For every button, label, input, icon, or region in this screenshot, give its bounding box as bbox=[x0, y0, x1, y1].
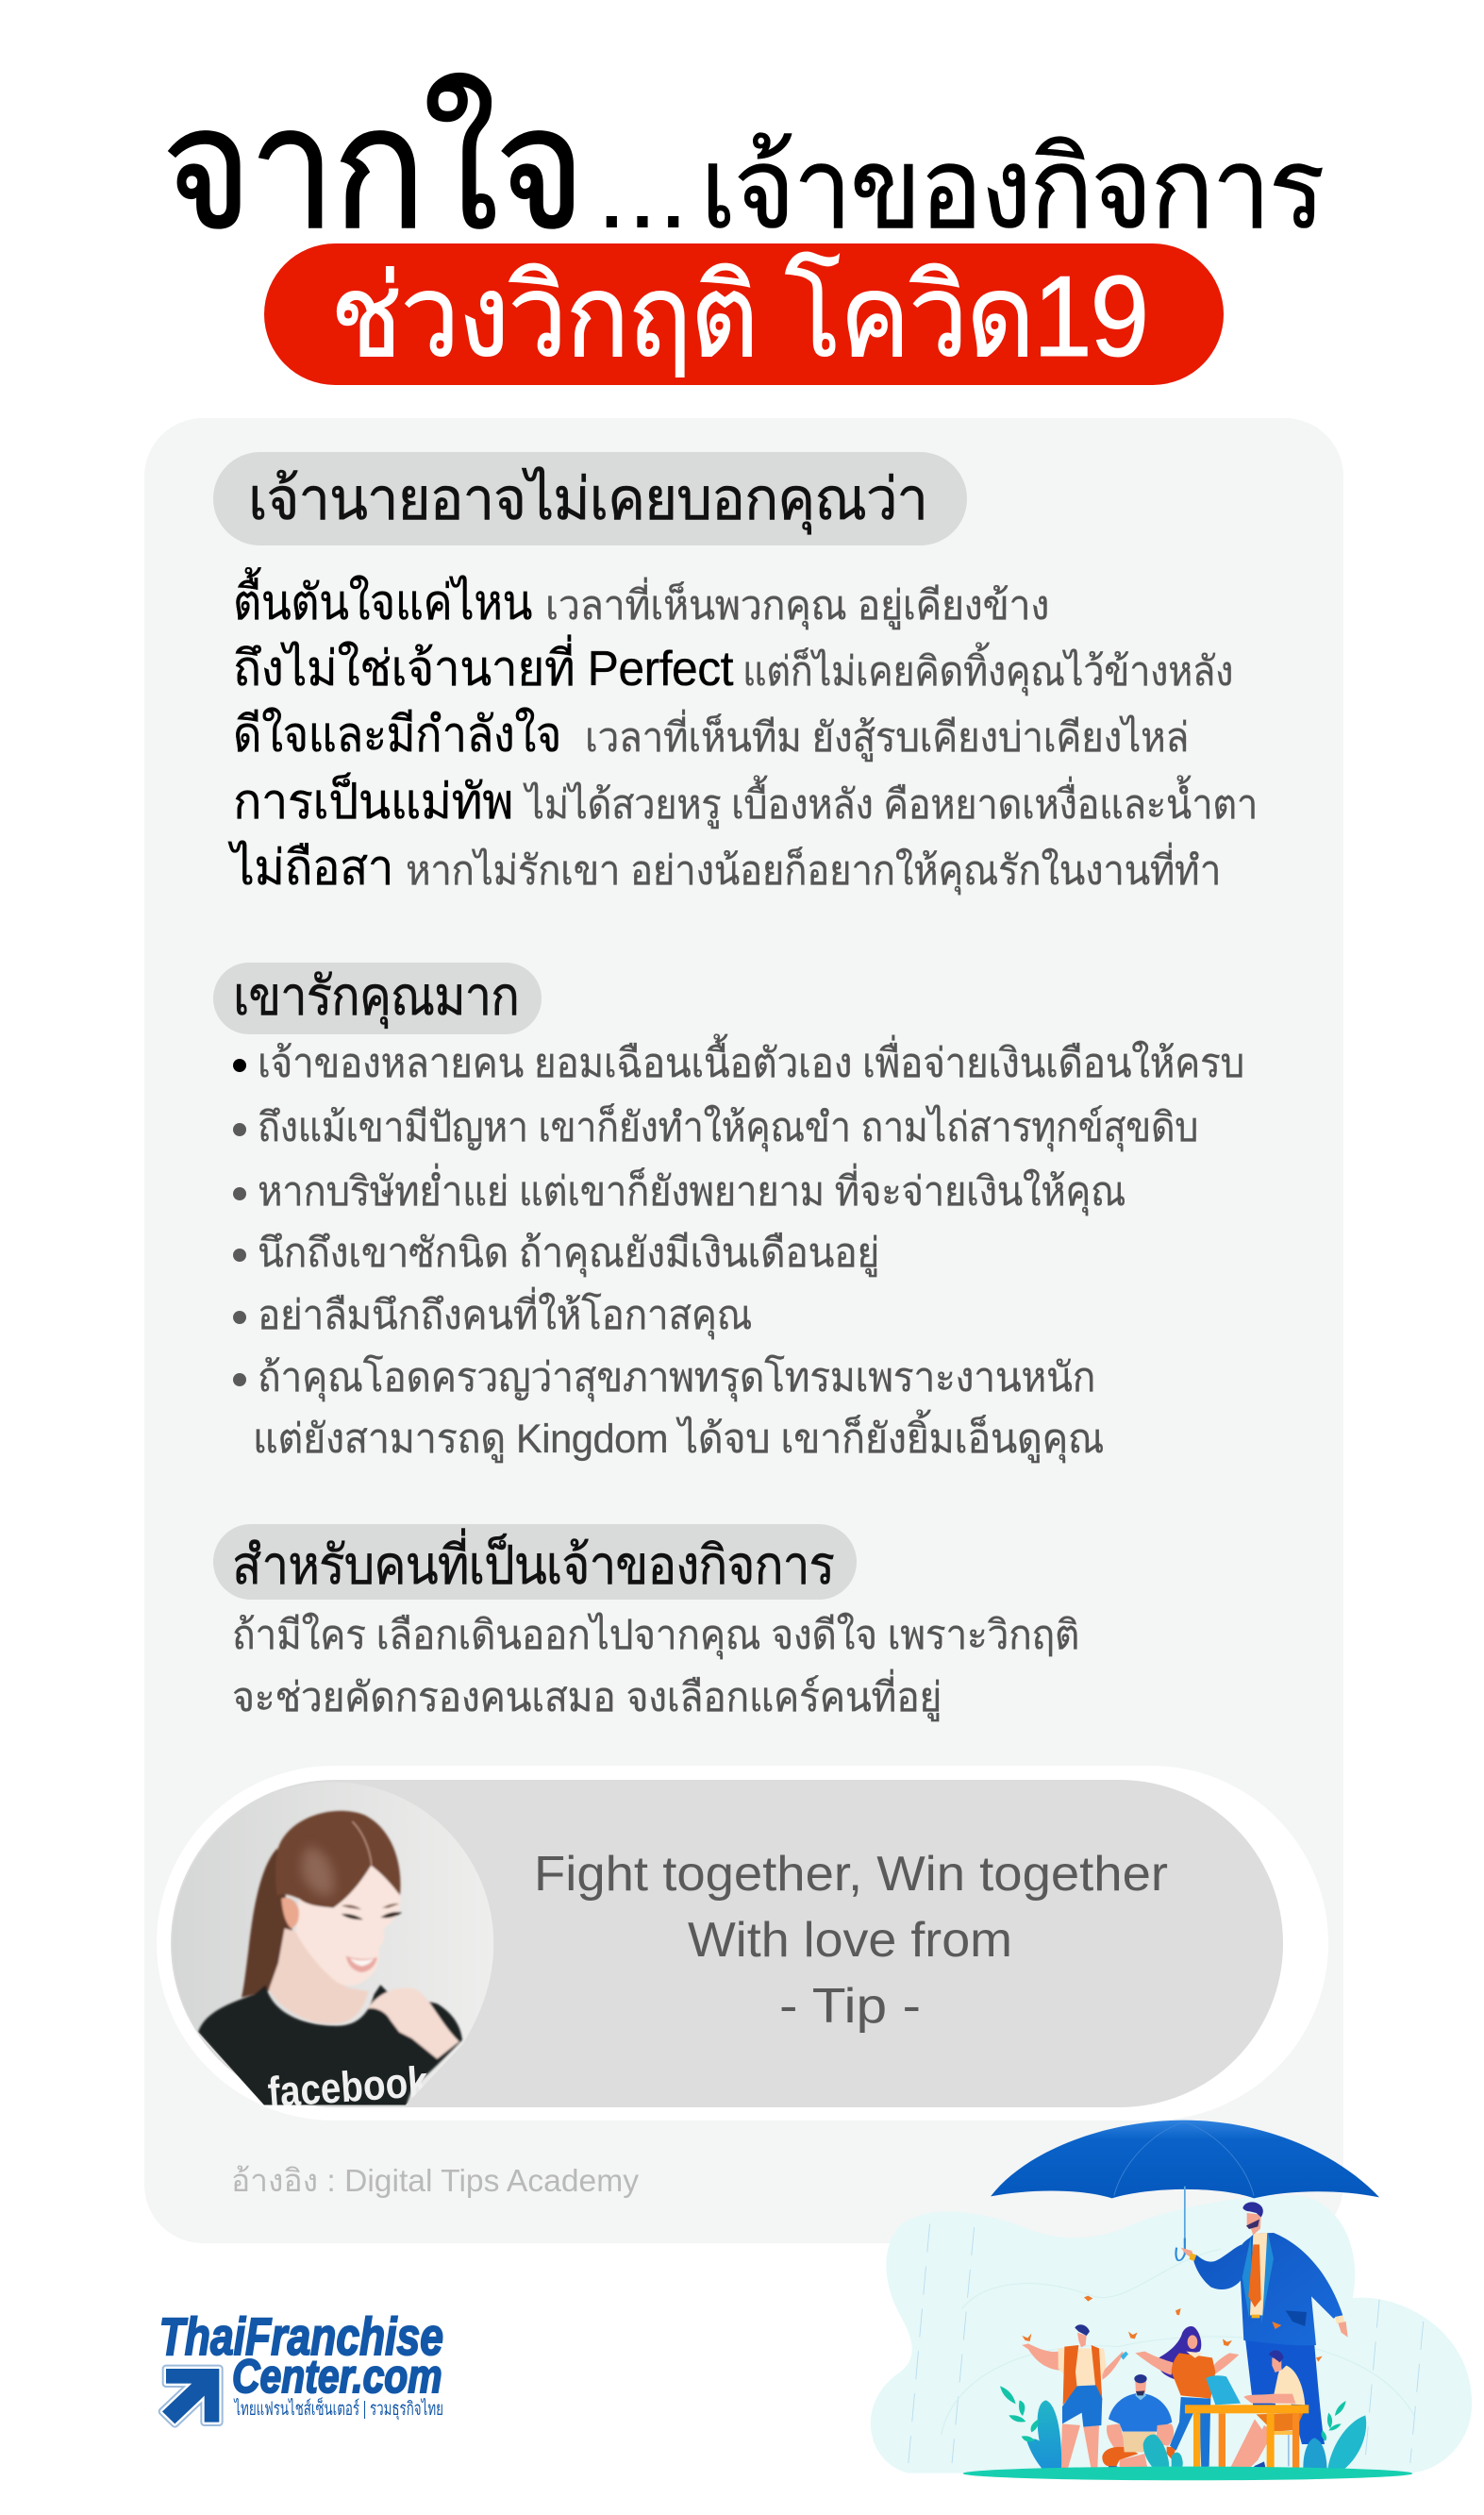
signature card bbox=[157, 1766, 1328, 2123]
text block: boss statements: ไม่ถือสา bbox=[227, 840, 393, 896]
text block: advice: จะช่วยคัดกรองคนเสมอ จงเลือกแคร์คนที่อยู่ bbox=[232, 1669, 942, 1722]
bullet list: ถึงแม้เขามีปัญหา เขาก็ยังทำให้คุณขำ ถามไถ่สารทุกข์สุขดิบ bbox=[258, 1103, 1198, 1152]
subtitle banner: ช่วงวิกฤติ โควิด19 bbox=[330, 252, 1147, 380]
reference credit: อ้างอิง : Digital Tips Academy bbox=[231, 2163, 640, 2198]
text block: boss statements: ถึงไม่ใช่เจ้านายที่ Perfect bbox=[233, 634, 734, 696]
team bbox=[963, 2296, 1412, 2480]
icon: arrow bbox=[162, 2369, 219, 2423]
heading: boss never told you: เจ้านายอาจไม่เคยบอกคุณว่า bbox=[248, 466, 927, 534]
author photo: facebook bbox=[266, 2057, 430, 2117]
desk bbox=[1185, 2405, 1309, 2473]
text block: boss statements bbox=[227, 567, 1258, 896]
signature text: - Tip - bbox=[779, 1979, 921, 2034]
bullet list: นึกถึงเขาซักนิด ถ้าคุณยังมีเงินเดือนอยู่ bbox=[258, 1231, 879, 1278]
signature text: With love from bbox=[688, 1913, 1012, 1968]
heading: he loves you: เขารักคุณมาก bbox=[233, 966, 519, 1030]
rain bbox=[909, 2224, 1424, 2463]
logo: ThaiFranchise Center bbox=[159, 2306, 443, 2423]
panel: message bbox=[144, 418, 1343, 2243]
text block: boss statements: การเป็นแม่ทัพ bbox=[233, 773, 513, 830]
umbrella bbox=[991, 2121, 1379, 2260]
author photo bbox=[196, 1787, 493, 2105]
man at desk bbox=[1206, 2350, 1305, 2473]
businessman bbox=[1181, 2202, 1348, 2444]
text block: boss statements: เวลาที่เห็นทีม ยังสู้รบเคียงบ่าเคียงไหล่ bbox=[585, 710, 1189, 763]
heading: boss never told you bbox=[213, 452, 967, 545]
bullet list: แต่ยังสามารถดู Kingdom ได้จบ เขาก็ยังยิ้มเอ็นดูคุณ bbox=[253, 1409, 1104, 1464]
plants bbox=[1000, 2386, 1366, 2473]
heading: for business owners: สำหรับคนที่เป็นเจ้าของกิจการ bbox=[232, 1528, 834, 1596]
text block: advice bbox=[232, 1612, 1079, 1722]
bullet list: ถ้าคุณโอดครวญว่าสุขภาพทรุดโทรมเพราะงานหนัก bbox=[258, 1354, 1095, 1402]
seated man with laptop bbox=[1102, 2374, 1183, 2473]
bullet list bbox=[233, 1033, 1244, 1464]
text block: boss statements: ตื้นตันใจแค่ไหน bbox=[233, 567, 532, 630]
title: จากใจ bbox=[161, 72, 582, 264]
text block: boss statements: แต่ก็ไม่เคยคิดทิ้งคุณไว้ข้างหลัง bbox=[742, 642, 1233, 696]
logo: ThaiFranchise Center: ThaiFranchise bbox=[159, 2306, 443, 2366]
signature text: Fight together, Win together bbox=[534, 1847, 1168, 1902]
text block: boss statements: ไม่ได้สวยหรู เบื้องหลัง คือหยาดเหงื่อและน้ำตา bbox=[523, 775, 1258, 830]
illustration: boss with umbrella protecting team bbox=[871, 2121, 1472, 2480]
text block: boss statements: หากไม่รักเขา อย่างน้อยก็อยากให้คุณรักในงานที่ทำ bbox=[406, 843, 1221, 896]
title bbox=[161, 72, 1323, 264]
ground bbox=[963, 2467, 1412, 2480]
man with phone bbox=[1022, 2324, 1128, 2473]
background cloud bbox=[871, 2195, 1472, 2473]
logo: ThaiFranchise Center: ไทยแฟรนไชส์เซ็นเตอร์ | รวมธุรกิจไทย bbox=[233, 2396, 443, 2421]
title: ... bbox=[596, 132, 689, 250]
butterflies bbox=[1022, 2296, 1323, 2362]
woman bbox=[1135, 2326, 1239, 2470]
title: เจ้าของกิจการ bbox=[700, 126, 1323, 252]
bullet list: อย่าลืมนึกถึงคนที่ให้โอกาสคุณ bbox=[258, 1287, 752, 1340]
text block: boss statements: ดีใจและมีกำลังใจ bbox=[233, 707, 561, 763]
text block: advice: ถ้ามีใคร เลือกเดินออกไปจากคุณ จงดีใจ เพราะวิกฤติ bbox=[232, 1612, 1079, 1660]
logo: ThaiFranchise Center: Center.com bbox=[232, 2350, 442, 2403]
bullet list: หากบริษัทย่ำแย่ แต่เขาก็ยังพยายาม ที่จะจ่ายเงินให้คุณ bbox=[258, 1164, 1126, 1216]
text block: boss statements: เวลาที่เห็นพวกคุณ อยู่เคียงข้าง bbox=[545, 578, 1049, 630]
signature text bbox=[534, 1847, 1168, 2034]
bullet list: เจ้าของหลายคน ยอมเฉือนเนื้อตัวเอง เพื่อจ่ายเงินเดือนให้ครบ bbox=[258, 1033, 1244, 1086]
